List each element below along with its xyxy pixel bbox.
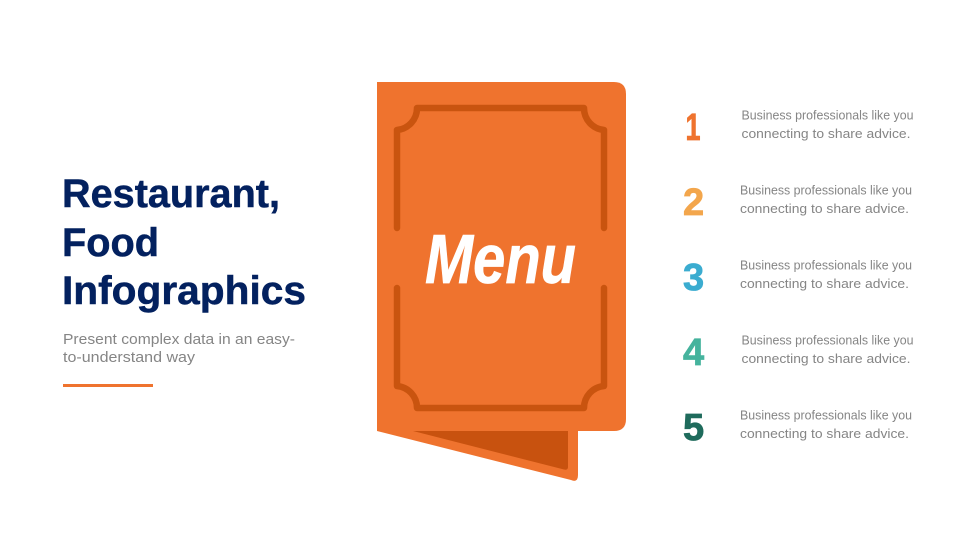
subtitle: to-understand way	[63, 349, 196, 366]
list item 3: 3	[683, 257, 704, 299]
top frame ornament	[397, 108, 604, 228]
icon: menu book	[377, 82, 626, 481]
subtitle: Present complex data in an easy-	[63, 331, 295, 348]
list item 1: 1	[686, 107, 700, 149]
front cover	[377, 82, 626, 431]
list item 2: 2	[683, 182, 704, 224]
title: Restaurant,	[62, 172, 280, 216]
list item 3: connecting to share advice.	[740, 276, 909, 291]
back flap	[377, 420, 578, 481]
title: Food	[62, 221, 159, 265]
list item 4: connecting to share advice.	[742, 351, 910, 366]
list item 4	[683, 332, 914, 374]
list item 5: connecting to share advice.	[740, 426, 909, 441]
list item 1	[686, 107, 914, 149]
list item 1: connecting to share advice.	[742, 126, 910, 141]
list item 5	[683, 407, 912, 449]
flap inner shadow	[413, 431, 568, 470]
list item 4: 4	[683, 332, 704, 374]
list item 3	[683, 257, 912, 299]
list item 5: 5	[683, 407, 704, 449]
list item 4: Business professionals like you	[742, 332, 914, 348]
list item 1: Business professionals like you	[742, 108, 914, 122]
menu label: Menu	[425, 220, 576, 298]
title	[62, 172, 306, 313]
title: Infographics	[62, 269, 306, 313]
list item 2: Business professionals like you	[740, 182, 912, 198]
bottom frame ornament	[397, 288, 604, 408]
subtitle	[63, 331, 295, 366]
list item 5: Business professionals like you	[740, 408, 912, 422]
list item 2	[683, 182, 912, 224]
list item 2: connecting to share advice.	[740, 201, 909, 216]
list item 3: Business professionals like you	[740, 258, 912, 272]
accent rule	[63, 384, 153, 387]
